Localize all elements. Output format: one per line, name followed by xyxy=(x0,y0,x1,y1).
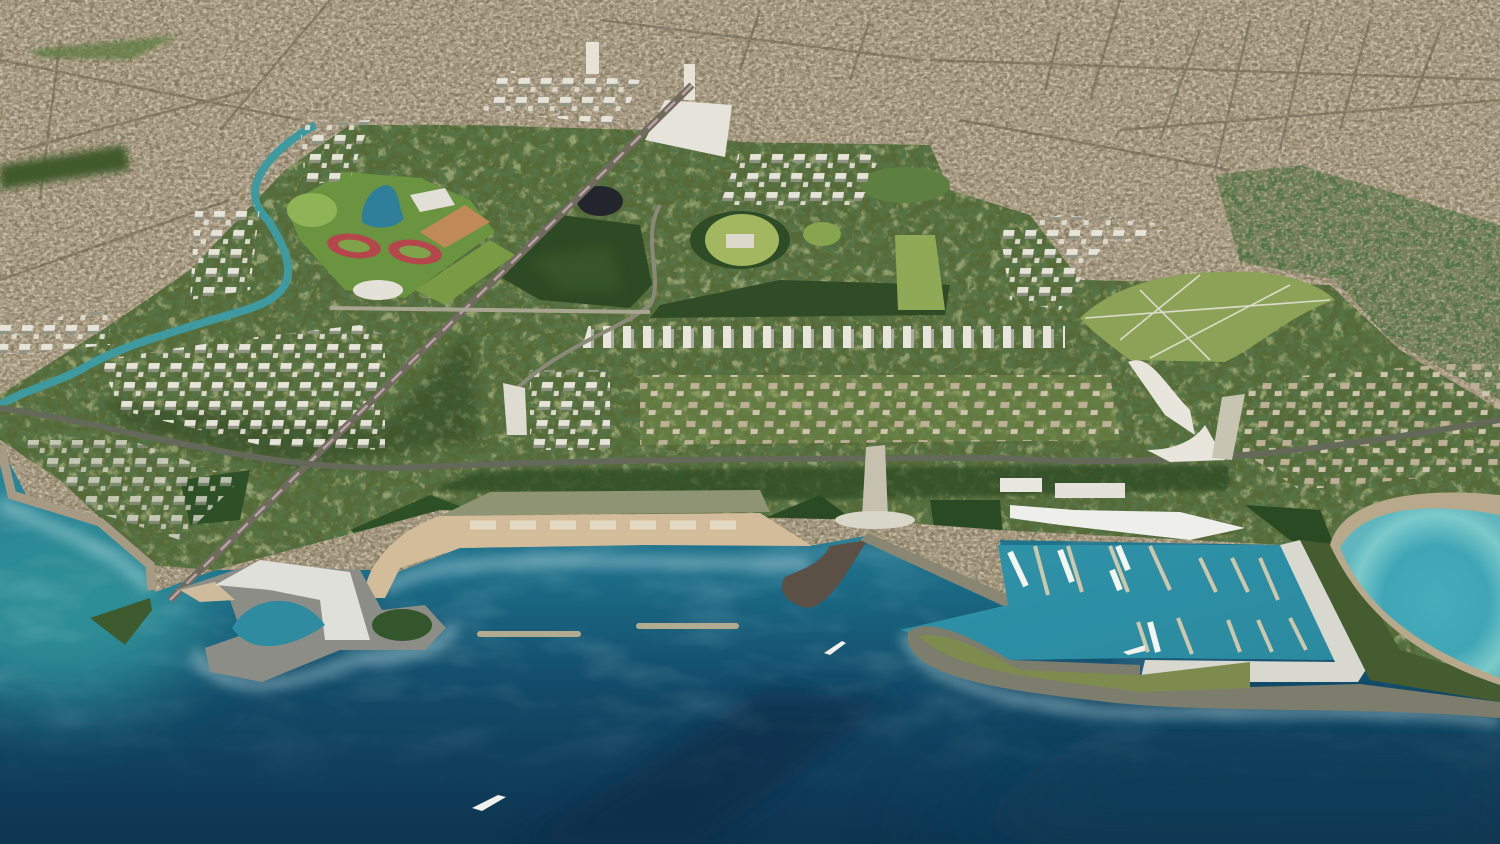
coastal highway xyxy=(0,408,1500,468)
round pier xyxy=(782,540,868,608)
marina terminal xyxy=(1000,478,1245,540)
green corridor west xyxy=(0,145,130,190)
cross road xyxy=(330,308,650,312)
sports park xyxy=(285,172,515,305)
low density villa lawns xyxy=(640,375,1120,445)
river channel xyxy=(0,125,315,405)
central forest xyxy=(497,215,652,308)
masterplan green zone xyxy=(0,125,1500,666)
northern district buildings xyxy=(480,70,640,125)
marina piers xyxy=(1035,546,1306,654)
boats xyxy=(472,641,1145,811)
surf along the shoreline xyxy=(0,500,1500,722)
tree massing xyxy=(100,330,480,470)
breakwaters xyxy=(477,623,739,637)
stadium pavilion by the lake xyxy=(410,188,455,212)
promenade beside the beach xyxy=(440,490,770,516)
beach xyxy=(365,504,812,598)
moored yachts xyxy=(1010,546,1158,652)
white residential districts xyxy=(0,120,1180,450)
arena dome xyxy=(577,186,623,216)
north towers and complex xyxy=(586,42,732,157)
marina basin xyxy=(900,545,1340,660)
tennis courts xyxy=(420,205,490,248)
playing fields xyxy=(415,240,515,305)
west tower xyxy=(503,383,527,435)
seawall xyxy=(860,533,1010,608)
east villas xyxy=(1240,360,1500,490)
western shoreline sand xyxy=(0,445,152,590)
northern forest strip xyxy=(650,280,950,318)
east tower complex xyxy=(1128,360,1245,462)
tram avenue xyxy=(170,85,692,600)
breakwater park xyxy=(918,635,1250,692)
central coastal tower xyxy=(835,445,915,529)
villa rooftops xyxy=(640,375,1120,445)
sea xyxy=(0,462,1500,844)
west coast villas xyxy=(20,440,240,540)
wooded hills east xyxy=(1215,165,1500,400)
small green peninsula xyxy=(90,598,152,645)
metropolitan park xyxy=(1080,272,1335,362)
east coast green strip xyxy=(1300,540,1500,702)
lake xyxy=(362,185,404,228)
mainland urban fabric xyxy=(0,0,1500,598)
western promontory xyxy=(175,560,446,682)
curved road xyxy=(510,205,660,395)
southern breakwater xyxy=(908,626,1500,718)
street grid of the city xyxy=(0,0,1500,280)
marina outer quay xyxy=(1140,540,1367,682)
athletics tracks xyxy=(326,230,382,262)
central park lawns xyxy=(690,167,950,310)
lagoon xyxy=(1330,492,1500,685)
